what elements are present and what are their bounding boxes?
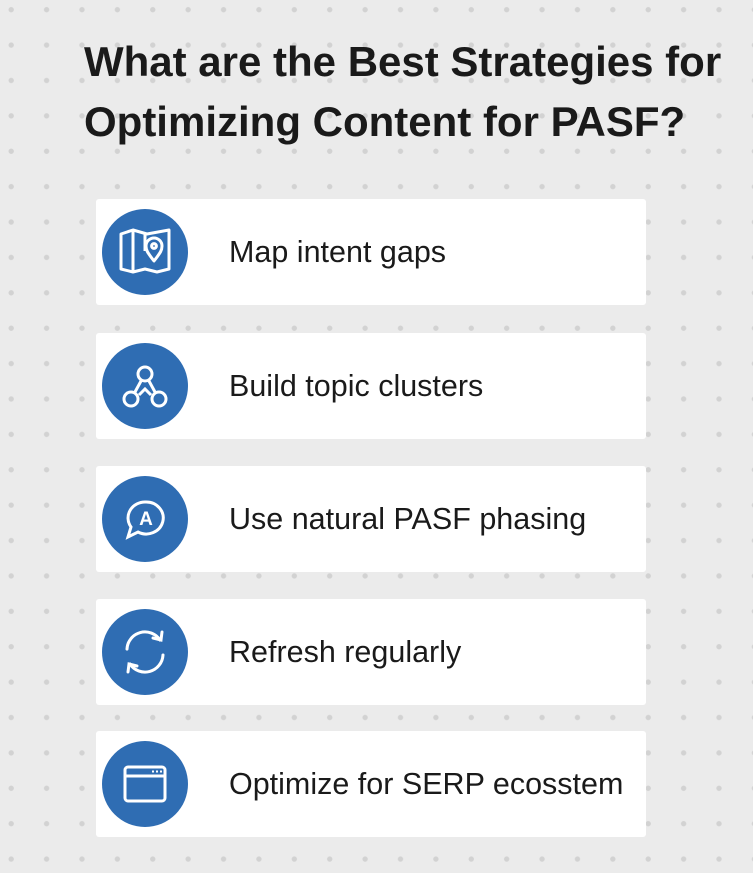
icon: browser window xyxy=(102,741,188,827)
text: Map intent gaps xyxy=(229,235,446,269)
icon: cluster xyxy=(102,343,188,429)
title xyxy=(84,38,721,145)
icon: refresh xyxy=(102,609,188,695)
title: Optimizing Content for PASF? xyxy=(84,98,685,145)
card: map intent gaps xyxy=(96,199,646,305)
text: Use natural PASF phasing xyxy=(229,502,586,536)
text: Refresh regularly xyxy=(229,635,461,669)
card: natural phrasing xyxy=(96,466,646,572)
icon: speech bubble A: A xyxy=(139,509,153,530)
card: refresh xyxy=(96,599,646,705)
card: SERP ecosystem xyxy=(96,731,646,837)
icon: speech bubble A xyxy=(102,476,188,562)
icon: map xyxy=(102,209,188,295)
text: Build topic clusters xyxy=(229,369,483,403)
title: What are the Best Strategies for xyxy=(84,38,721,85)
card: build topic clusters xyxy=(96,333,646,439)
text: Optimize for SERP ecosstem xyxy=(229,767,623,801)
